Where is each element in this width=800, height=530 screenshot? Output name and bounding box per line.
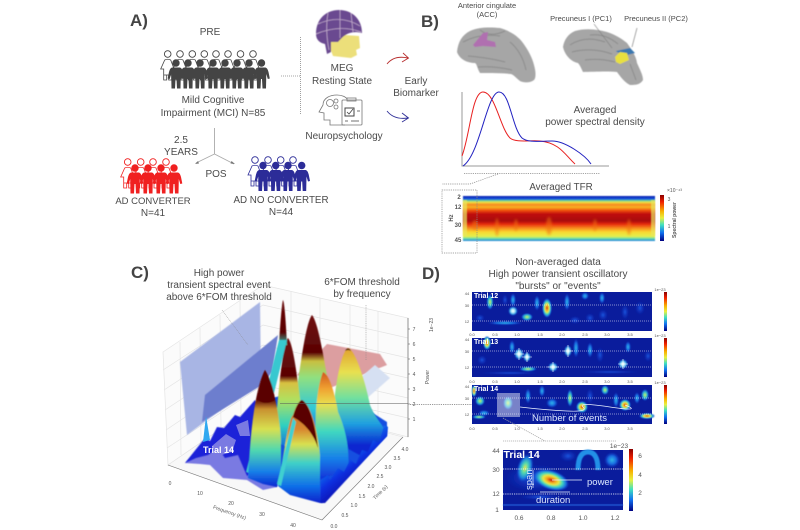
axis: time: 0.5 xyxy=(342,513,349,519)
second ridge band xyxy=(277,418,296,486)
text: anterior cingulate label: (ACC) xyxy=(477,10,498,19)
text: follow-up time: YEARS xyxy=(164,147,198,158)
enlarged spectrogram axis labels: 0.8 xyxy=(546,515,556,522)
spectrogram tick labels: 2.5 xyxy=(582,426,589,431)
spectrogram tick labels: 1.5 xyxy=(537,332,544,337)
spectrogram tick labels: 0.0 xyxy=(469,379,476,384)
text: follow-up time xyxy=(164,135,198,158)
TFR axis labels: 2 xyxy=(457,195,461,201)
text: MEG resting state xyxy=(312,63,372,87)
peak 2 xyxy=(274,338,303,455)
white burst crosses xyxy=(514,345,628,372)
text: MCI group label: Impairment (MCI) N=85 xyxy=(161,108,266,119)
axis: time: 1.5 xyxy=(359,494,366,500)
text: anterior cingulate label xyxy=(458,1,516,19)
surface base mound xyxy=(250,392,387,503)
spectrogram: trial 13: 1e−23 xyxy=(654,333,666,338)
label: neuropsychology: Neuropsychology xyxy=(305,131,383,142)
surface: translucent front xyxy=(185,440,281,490)
label: POS: POS xyxy=(205,169,227,180)
peak 4 xyxy=(248,370,281,487)
text: precuneus I label: Precuneus I (PC1) xyxy=(550,14,612,23)
text: PSD title xyxy=(545,105,645,128)
text: spectral event annotation: above 6*FOM threshold xyxy=(166,292,272,303)
spectrogram tick labels: 1.0 xyxy=(514,332,521,337)
axis: power: 3 xyxy=(413,387,416,393)
text: non-averaged title: "bursts" or "events" xyxy=(515,281,601,292)
heading: D: D) xyxy=(422,264,440,283)
text: AD converter label: AD CONVERTER xyxy=(115,196,191,207)
spectrogram tick labels: 44 xyxy=(465,337,470,342)
TFR axis labels: 30 xyxy=(455,223,462,229)
peak 7 xyxy=(315,372,349,480)
spectrogram tick labels: 1.5 xyxy=(537,379,544,384)
axis: frequency: Frequency (Hz) xyxy=(212,505,247,522)
enlarged spectrogram axis labels: 1 xyxy=(495,507,499,514)
spectrogram: trial 14 xyxy=(472,380,667,424)
colorbar: enlarged spectrogram: 2 xyxy=(638,490,642,497)
threshold plane: blue back xyxy=(180,302,261,435)
spectrogram: trial 12 xyxy=(472,287,667,331)
surface peaks xyxy=(246,300,388,503)
enlarged spectrogram axis labels: 1e−23 xyxy=(610,443,629,450)
panel: measurements xyxy=(305,10,439,142)
spike near left xyxy=(203,416,210,442)
spectrogram tick labels: 3.5 xyxy=(627,332,634,337)
spectrogram tick labels: 0.5 xyxy=(492,332,499,337)
spectrogram tick labels: 2.5 xyxy=(582,332,589,337)
front ridges xyxy=(320,425,388,503)
icon: neuropsychology head and clipboard xyxy=(319,95,362,125)
enlarged spectrogram axis labels xyxy=(492,443,629,522)
text: threshold annotation xyxy=(324,277,400,300)
text: non-averaged title xyxy=(489,257,627,292)
spectrogram: trial 13: Trial 13 xyxy=(474,339,498,346)
colorbar: TFR: Spectral power xyxy=(672,202,678,238)
spectrogram: trial 14 enlarged xyxy=(503,449,623,510)
spectrogram tick labels: 2.5 xyxy=(582,379,589,384)
axis: power: 2 xyxy=(413,402,416,408)
enlarged spectrogram axis labels: 1.2 xyxy=(610,515,620,522)
axis: power: 6 xyxy=(413,342,416,348)
spectrogram tick labels: 3.0 xyxy=(604,426,611,431)
colorbar: enlarged spectrogram: 6 xyxy=(638,453,642,460)
TFR axis labels: Hz xyxy=(449,214,455,222)
peak 4 cap xyxy=(258,370,275,403)
peak 6 tip xyxy=(345,348,351,351)
axis: time xyxy=(322,437,409,530)
TFR axis labels xyxy=(449,195,462,244)
spectrogram tick labels: 1.5 xyxy=(537,426,544,431)
text: AD non-converter label: AD NO CONVERTER xyxy=(233,195,329,206)
axis: power: 5 xyxy=(413,357,416,363)
spectrogram: trial 14: Trial 14 xyxy=(474,386,498,393)
icon: AD non-converter group xyxy=(248,157,310,191)
spectrogram: trial 12: Trial 12 xyxy=(474,293,498,300)
spectrogram tick labels: 44 xyxy=(465,291,470,296)
line chart: averaged power spectral density xyxy=(462,92,609,166)
spectrogram tick labels: 44 xyxy=(465,384,470,389)
spectrogram tick labels: 0.0 xyxy=(469,332,476,337)
spectrogram tick labels: 1.0 xyxy=(514,426,521,431)
axis: frequency xyxy=(168,465,322,529)
axis: time: 0.0 xyxy=(331,524,338,530)
spectrogram tick labels: 30 xyxy=(465,396,470,401)
colorbar: TFR: ×10⁻⁴³ xyxy=(667,188,682,194)
text: AD non-converter label: N=44 xyxy=(269,207,294,218)
axis: power: Power xyxy=(425,370,431,384)
spectrogram tick labels: 3.0 xyxy=(604,332,611,337)
text: early biomarker: Early xyxy=(405,76,427,87)
spectrogram tick labels: 0.0 xyxy=(469,426,476,431)
axis: frequency: 40 xyxy=(290,523,296,529)
heatmap: averaged TFR xyxy=(463,196,655,241)
axis: frequency: 30 xyxy=(259,512,265,518)
text: non-averaged title: Non-averaged data xyxy=(515,257,601,268)
text: threshold annotation: 6*FOM threshold xyxy=(324,277,400,288)
surface: left jagged base xyxy=(185,400,262,476)
axis: time: 2.0 xyxy=(368,484,375,490)
axis: time: 2.5 xyxy=(377,474,384,480)
axis: time: 1.0 xyxy=(351,503,358,509)
spectrogram: trial 14 enlarged: duration xyxy=(536,495,570,506)
peak 1 xyxy=(279,300,287,345)
colorbar: enlarged spectrogram: 4 xyxy=(638,472,642,479)
enlarged spectrogram axis labels: 1.0 xyxy=(578,515,588,522)
axis: frequency: 10 xyxy=(197,491,203,497)
text: spectral event annotation: High power xyxy=(194,268,245,279)
axis: time: Time (s) xyxy=(372,484,389,501)
text: early biomarker xyxy=(393,76,439,99)
colorbar: enlarged spectrogram xyxy=(629,449,642,511)
threshold plane: blue front xyxy=(202,335,278,422)
peak 6 xyxy=(332,348,387,458)
spectrogram tick labels: 12 xyxy=(465,319,470,324)
text: early biomarker: Biomarker xyxy=(393,88,439,99)
text: MEG resting state: Resting State xyxy=(312,76,372,87)
spectrogram tick labels: 2.0 xyxy=(559,332,566,337)
panel: B averaged data xyxy=(421,1,688,253)
text: PSD title: power spectral density xyxy=(545,117,645,128)
spectrogram: trial 13 xyxy=(472,333,667,377)
icon: brain with ACC xyxy=(457,27,536,82)
colorbar: TFR: 1 xyxy=(668,224,671,230)
text: threshold annotation: by frequency xyxy=(333,289,391,300)
spectrogram tick labels: 12 xyxy=(465,412,470,417)
icon: AD converter group xyxy=(121,159,182,194)
axis: power: 1e−23 xyxy=(429,318,435,332)
3D axes walls xyxy=(163,285,408,520)
spectrogram: trial 14 enlarged: power xyxy=(587,477,613,488)
ridge band xyxy=(246,340,287,475)
heading: C: C) xyxy=(131,263,149,282)
spectrogram tick labels: 0.5 xyxy=(492,426,499,431)
spectrogram: trial 12: 1e−23 xyxy=(654,287,666,292)
axis: time: 4.0 xyxy=(402,447,409,453)
enlarged spectrogram axis labels: 30 xyxy=(492,467,500,474)
text: non-averaged title: High power transient oscillatory xyxy=(489,269,627,280)
spectrogram tick labels: 30 xyxy=(465,303,470,308)
axis: frequency: 20 xyxy=(228,501,234,507)
text: spectral event annotation xyxy=(166,268,272,303)
panel: C 3D surface plot xyxy=(131,263,435,530)
text: spectral event annotation: transient spectral event xyxy=(167,280,271,291)
heading: A: A) xyxy=(130,11,148,30)
spectrogram tick labels: 3.5 xyxy=(627,379,634,384)
axis: frequency: 0 xyxy=(169,481,172,487)
icon: MEG helmet on head xyxy=(316,10,362,58)
text: follow-up time: 2.5 xyxy=(174,135,188,146)
label: PRE: PRE xyxy=(200,27,221,38)
icon: brain with precuneus xyxy=(563,24,643,85)
spectrogram tick labels: 30 xyxy=(465,349,470,354)
enlarged spectrogram axis labels: 0.6 xyxy=(514,515,524,522)
enlarged spectrogram axis labels: 44 xyxy=(492,448,500,455)
axis: power: 7 xyxy=(413,327,416,333)
axis: power xyxy=(408,318,435,437)
enlarged spectrogram axis labels: 12 xyxy=(492,491,500,498)
spectrogram tick labels: 3.5 xyxy=(627,426,634,431)
spectrogram: trial 14: Number of events xyxy=(532,413,607,424)
axis: power: 4 xyxy=(413,372,416,378)
spectrogram tick labels: 2.0 xyxy=(559,426,566,431)
text: PSD title: Averaged xyxy=(574,105,616,116)
spectrogram tick labels: 3.0 xyxy=(604,379,611,384)
spectrogram tick labels xyxy=(465,291,634,431)
text: MCI group label: Mild Cognitive xyxy=(182,95,245,106)
TFR axis labels: 45 xyxy=(455,238,462,244)
surface: left translucent patches xyxy=(212,420,250,456)
text: MEG resting state: MEG xyxy=(331,63,354,74)
spectrogram: trial 14 enlarged: Trial 14 xyxy=(504,449,540,461)
colorbar: TFR xyxy=(660,188,682,241)
spectrogram tick labels: 0.5 xyxy=(492,379,499,384)
axis: time: 3.5 xyxy=(394,456,401,462)
text: precuneus II label: Precuneus II (PC2) xyxy=(624,14,688,23)
TFR axis labels: 12 xyxy=(455,205,462,211)
threshold plane: pale blue xyxy=(340,365,390,400)
text: AD converter label xyxy=(115,196,191,219)
panel: A cohort design xyxy=(115,11,329,219)
peak 5 cap xyxy=(293,400,318,448)
spectrogram tick labels: 1.0 xyxy=(514,379,521,384)
heading: B: B) xyxy=(421,12,439,31)
panel: D non-averaged spectrograms xyxy=(422,257,667,522)
axis: time: 3.0 xyxy=(385,465,392,471)
arrow: blue early biomarker xyxy=(387,111,408,122)
label: trial 14: Trial 14 xyxy=(203,445,234,455)
arrows: group split xyxy=(195,128,235,164)
threshold plane: pink xyxy=(297,344,387,388)
spectrogram: trial 14 enlarged: span xyxy=(524,469,535,490)
spectrogram tick labels: 2.0 xyxy=(559,379,566,384)
spectrogram tick labels: 12 xyxy=(465,365,470,370)
icon: MCI group of people xyxy=(161,51,270,88)
title: averaged TFR: Averaged TFR xyxy=(529,182,593,193)
peak 3 xyxy=(290,315,337,450)
text: MCI group label xyxy=(161,95,266,119)
colorbar: TFR: 3 xyxy=(668,197,671,203)
arrow: red early biomarker xyxy=(387,53,408,64)
text: AD converter label: N=41 xyxy=(141,208,166,219)
spectrogram: trial 14: 1e−23 xyxy=(654,380,666,385)
text: anterior cingulate label: Anterior cingulate xyxy=(458,1,516,10)
peak 5 xyxy=(278,400,320,503)
text: AD non-converter label xyxy=(233,195,329,218)
axis: power: 1 xyxy=(413,417,416,423)
